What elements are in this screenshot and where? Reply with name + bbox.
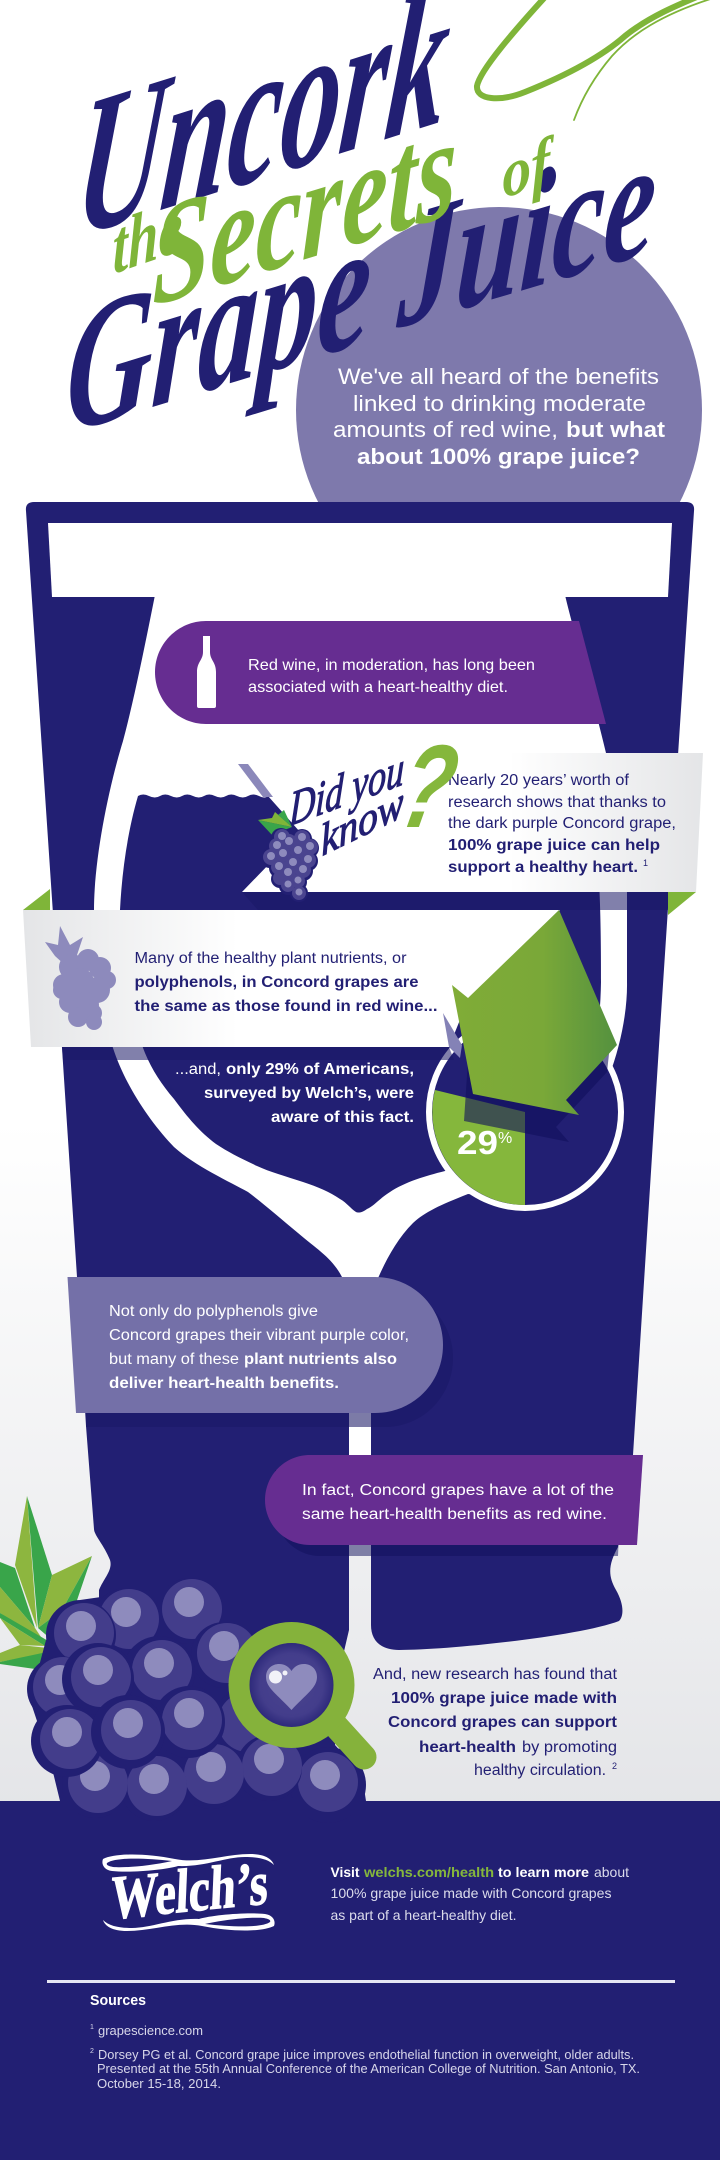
- pie green slice: [432, 1090, 525, 1205]
- circulation text: 2: [612, 1761, 617, 1771]
- did you know heading: Did you: [288, 741, 405, 838]
- did you know text: research shows that thanks to: [448, 794, 666, 811]
- icon: small grape bunch: [258, 810, 319, 902]
- 29 percent text: aware of this fact.: [271, 1109, 414, 1126]
- panel: red wine: [155, 621, 606, 724]
- logo wordmark: Welch’s: [109, 1848, 270, 1933]
- magnifier ring: [239, 1632, 344, 1738]
- footer divider: [47, 1980, 675, 1983]
- icon: wine bottle: [197, 636, 216, 708]
- same benefits text: In fact, Concord grapes have a lot of the: [302, 1482, 614, 1499]
- did you know text: support a healthy heart.: [448, 859, 638, 876]
- arrow body: [452, 910, 617, 1115]
- footer call to action: about: [594, 1864, 629, 1880]
- sources: 1: [90, 2024, 94, 2031]
- ring shadow wedge: [443, 1013, 462, 1058]
- title word: the: the: [112, 182, 183, 290]
- did you know text: the dark purple Concord grape,: [448, 815, 676, 832]
- panel shadow: [62, 1047, 454, 1060]
- 29% label: [457, 1124, 512, 1161]
- logo ribbon top: [102, 1854, 274, 1872]
- circulation text: by promoting: [522, 1739, 617, 1756]
- plant nutrients text: deliver heart-health benefits.: [109, 1375, 339, 1392]
- pie chart: 29%: [429, 1016, 621, 1208]
- panel shadow: [86, 1290, 453, 1427]
- logo: Welch's: [102, 1848, 275, 1933]
- plant nutrients text: but many of these: [109, 1351, 239, 1368]
- plant nutrients text: [109, 1303, 409, 1392]
- did you know heading: [288, 721, 468, 866]
- glass silhouette: [26, 502, 694, 1660]
- plant nutrients text: plant nutrients also: [244, 1351, 397, 1368]
- title word: of: of: [501, 121, 556, 213]
- polyphenols text: Many of the healthy plant nutrients, or: [134, 950, 406, 967]
- magnifier lens: [250, 1643, 334, 1727]
- grape berries: [260, 828, 319, 902]
- arrow shadow: [464, 1020, 610, 1142]
- did you know text: Nearly 20 years’ worth of: [448, 772, 630, 789]
- footer call to action: [330, 1864, 629, 1923]
- icon: grape silhouette: [45, 926, 116, 1030]
- red wine text: Red wine, in moderation, has long been: [248, 657, 535, 674]
- circulation text: healthy circulation.: [474, 1762, 606, 1779]
- 29 percent text: only 29% of Americans,: [226, 1061, 414, 1078]
- did you know text: 1: [643, 858, 648, 868]
- circulation text: And, new research has found that: [373, 1666, 618, 1683]
- footer call to action: 100% grape juice made with Concord grapes: [330, 1885, 612, 1901]
- red wine text: [248, 657, 535, 696]
- 29 percent text: ...and,: [175, 1061, 221, 1078]
- circulation text: 100% grape juice made with: [391, 1690, 617, 1707]
- white wine glass: [94, 595, 627, 1292]
- panel: polyphenols: [23, 910, 560, 1060]
- title word: Secrets: Secrets: [151, 84, 458, 338]
- sources: Dorsey PG et al. Concord grape juice improves endothelial function in overweight, older adults.: [98, 2047, 634, 2062]
- grape leaf: [258, 810, 292, 835]
- heart highlight: [269, 1670, 288, 1684]
- polyphenols text: the same as those found in red wine...: [134, 998, 438, 1015]
- sources: Presented at the 55th Annual Conference of the American College of Nutrition. San Antonio, TX.: [97, 2061, 640, 2076]
- circulation text: Concord grapes can support: [388, 1714, 617, 1731]
- footer call to action: as part of a heart-healthy diet.: [330, 1907, 516, 1923]
- plant nutrients text: Concord grapes their vibrant purple color,: [109, 1327, 409, 1344]
- panel: did you know: [242, 721, 703, 910]
- magnifier handle: [335, 1725, 364, 1757]
- did-you-know fold corner: [668, 892, 696, 915]
- icon: grape leaves: [0, 1496, 92, 1673]
- stem white strip: [349, 1427, 371, 1457]
- intro text: about 100% grape juice?: [357, 444, 640, 469]
- icon: heart: [266, 1664, 317, 1710]
- footer call to action: Visit: [330, 1864, 360, 1880]
- green flourish: [477, 0, 720, 120]
- 29 percent text: [175, 1061, 414, 1126]
- logo ribbon bottom: [103, 1913, 275, 1931]
- intro text: amounts of red wine,: [333, 417, 558, 442]
- polyphenols text: polyphenols, in Concord grapes are: [134, 974, 419, 991]
- intro text: but what: [566, 417, 666, 442]
- red wine text: associated with a heart-healthy diet.: [248, 679, 508, 696]
- sources: 2: [90, 2048, 94, 2055]
- intro text: linked to drinking moderate: [353, 391, 646, 416]
- intro circle: [296, 207, 702, 613]
- sources: grapescience.com: [98, 2023, 203, 2038]
- did you know text: 100% grape juice can help: [448, 837, 660, 854]
- arrow pointing to pie: [452, 910, 617, 1142]
- 29% label: 29: [457, 1124, 498, 1161]
- panel shadow: [275, 1470, 622, 1556]
- footer band: [0, 1801, 720, 2160]
- intro text: [333, 364, 666, 469]
- glass rim opening: [48, 523, 672, 597]
- title word: Grape: Grape: [62, 179, 377, 474]
- footer call to action: welchs.com/health: [363, 1864, 494, 1880]
- many-of panel fold corner: [23, 889, 50, 910]
- icon: magnifying glass: [239, 1632, 364, 1757]
- circulation text: [373, 1666, 618, 1779]
- sources: October 15-18, 2014.: [97, 2076, 221, 2091]
- band shadow strip: [238, 764, 273, 797]
- did you know heading: know: [319, 777, 406, 866]
- did you know heading: ?: [389, 721, 468, 853]
- did you know text: [448, 772, 676, 876]
- panel shadow: [242, 892, 668, 910]
- icon: grape cluster: [27, 1578, 366, 1823]
- 29 percent text: surveyed by Welch’s, were: [204, 1085, 414, 1102]
- same benefits text: same heart-health benefits as red wine.: [302, 1506, 607, 1523]
- 29% label: %: [498, 1130, 512, 1147]
- plant nutrients text: Not only do polyphenols give: [109, 1303, 318, 1320]
- panel: same benefits: [265, 1455, 643, 1556]
- sources: Sources: [90, 1992, 146, 2009]
- polyphenols text: [134, 950, 438, 1015]
- title: [62, 0, 720, 474]
- intro text: We've all heard of the benefits: [338, 364, 659, 389]
- circulation text: heart-health: [419, 1739, 516, 1756]
- sources: [90, 1992, 640, 2091]
- panel: plant nutrients: [68, 1277, 453, 1427]
- same benefits text: [302, 1482, 614, 1523]
- footer call to action: to learn more: [498, 1864, 589, 1880]
- wine in glass: [120, 794, 601, 1213]
